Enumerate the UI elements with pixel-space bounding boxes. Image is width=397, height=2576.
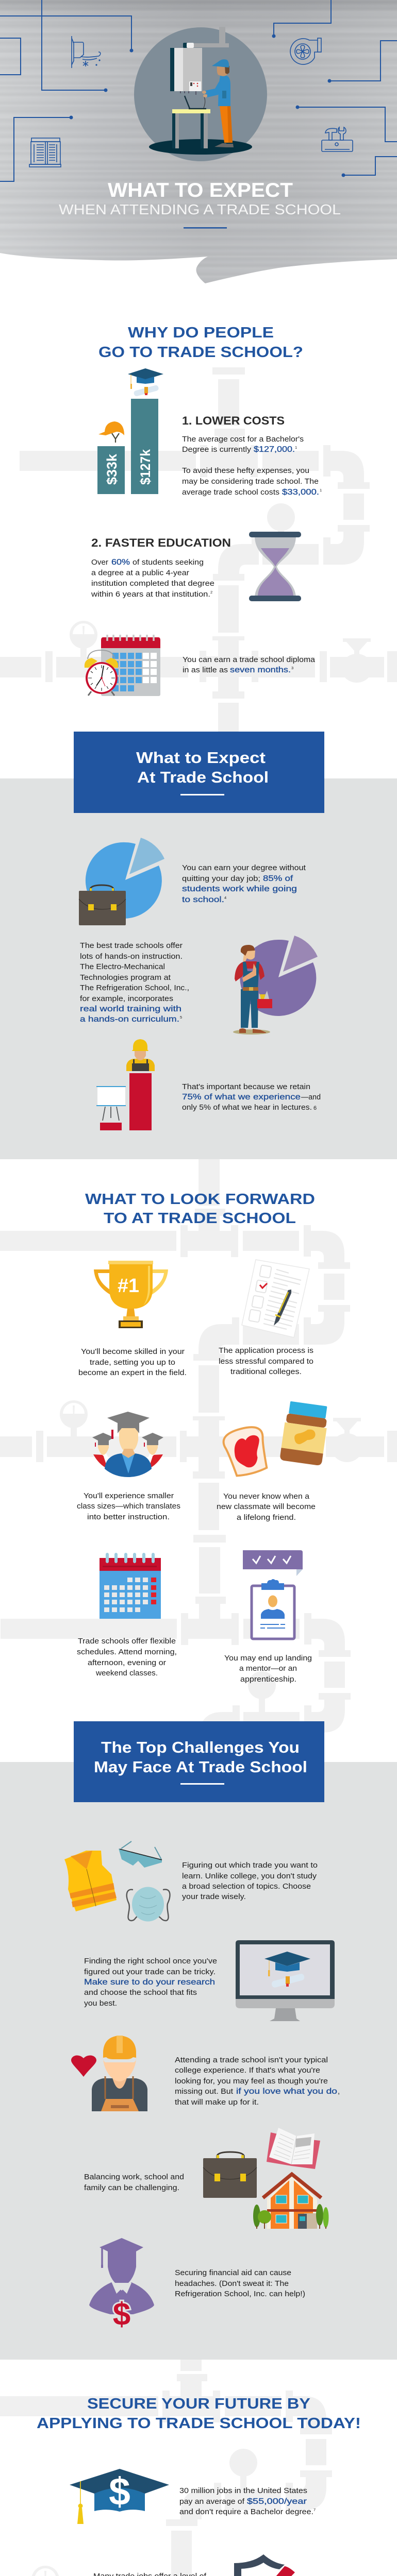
section: faster education: 2. FASTER EDUCATION	[91, 536, 231, 549]
text: college experience: ,	[338, 2088, 340, 2096]
toast	[221, 1424, 272, 1479]
text: 30 million jobs: 30 million jobs in the United States	[179, 2487, 307, 2495]
heading: what to look forward to	[85, 1191, 315, 1227]
icon: toast and peanut butter	[221, 1401, 330, 1479]
text: seven months: 3	[291, 666, 293, 670]
text: balancing work	[84, 2173, 184, 2192]
alarm clock	[88, 650, 114, 659]
text: lifelong friend: a lifelong friend.	[237, 1514, 296, 1522]
heading: why do people go: GO TO TRADE SCHOOL?	[98, 344, 303, 361]
text: flexible schedules: schedules. Attend morning,	[77, 1648, 177, 1656]
clipboard	[252, 1586, 294, 1639]
icon: worker with heart	[71, 2036, 147, 2111]
heading: secure your future	[37, 2396, 361, 2432]
panel: top challenges heading box: May Face At Trade School	[94, 1758, 307, 1776]
section: lower costs: average trade school costs	[182, 488, 279, 497]
panel: what to expect heading box: At Trade School	[137, 768, 269, 786]
section: faster education: 2	[210, 590, 212, 595]
icon: condenser unit	[29, 138, 61, 167]
chart: cost bars	[97, 368, 163, 494]
icon: shield with check	[234, 2554, 295, 2576]
section: lower costs: 1	[295, 445, 297, 450]
chart: cost bars: $127k	[138, 449, 153, 485]
icon: mentor clipboard and speech bubble	[243, 1550, 303, 1639]
pie: 85 percent	[86, 842, 162, 919]
text: lifelong friend: You never know when a	[223, 1493, 310, 1501]
icon: briefcase	[79, 885, 126, 925]
section: faster education: of students seeking	[133, 558, 204, 567]
icon: presentation board	[96, 1086, 126, 1121]
text: work while going to school: 4	[224, 895, 226, 900]
icon: graduates	[92, 1412, 163, 1477]
text: seven months	[183, 656, 316, 674]
heading: secure your future: SECURE YOUR FUTURE BY	[87, 2396, 310, 2412]
text: flexible schedules: Trade schools offer flexible	[78, 1637, 176, 1646]
heading: why do people go	[98, 325, 303, 361]
dust mask	[127, 1887, 170, 1922]
panel: what to expect grey band	[0, 778, 397, 1159]
text: hands-on instruction: for example, incorporates	[80, 995, 173, 1003]
heading: why do people go: WHY DO PEOPLE	[128, 325, 274, 341]
text: retention	[182, 1083, 321, 1112]
backdrop oval	[134, 27, 267, 161]
panel: what to expect heading box: What to Expect	[136, 749, 266, 767]
jar	[279, 1401, 330, 1466]
header: brushed metal banner	[0, 0, 397, 289]
text: skilled in trade: become an expert in the field.	[78, 1369, 187, 1377]
text: college experience: college experience. If that's what you're	[175, 2066, 320, 2075]
technician figure	[220, 106, 233, 143]
text: application process: less stressful compared to	[219, 1358, 313, 1366]
speech bubble	[243, 1550, 303, 1569]
text: smaller class sizes	[77, 1492, 180, 1521]
briefcase	[203, 2152, 257, 2198]
section: faster education: 60%	[111, 558, 130, 567]
text: right school: figured out your trade can be tricky.	[84, 1968, 216, 1976]
text: seven months: seven months.	[230, 666, 291, 674]
text: mentor or apprenticeship: You may end up landing	[224, 1654, 312, 1663]
text: balancing work: family can be challenging.	[84, 2184, 179, 2192]
text: smaller class sizes: into better instruction.	[87, 1513, 170, 1521]
text: 30 million jobs: pay an average of	[179, 2498, 245, 2506]
section: lower costs: 1	[320, 488, 322, 493]
text: flexible schedules: weekend classes.	[95, 1669, 158, 1677]
icon: tools and AC unit	[322, 127, 353, 151]
icon: briefcase, book and house	[203, 2128, 329, 2229]
icon: graduate with dollar sign: $	[113, 2297, 130, 2332]
text: retention: —and	[301, 1093, 321, 1101]
text: lifelong friend	[217, 1493, 316, 1522]
safety vest	[64, 1851, 117, 1911]
header circuit lines	[0, 0, 397, 181]
bar: lecture 5 percent	[100, 1123, 122, 1130]
text: retention: That's important because we retain	[182, 1083, 310, 1091]
text: work while going to school: to school.	[182, 895, 224, 904]
text: work while going to school: 85% of	[263, 874, 293, 883]
icon: hard hat	[98, 421, 124, 443]
text: college experience: if you love what you do	[236, 2087, 337, 2096]
laptop	[185, 96, 206, 109]
text: retention: 75% of what we experience	[182, 1093, 301, 1101]
icon: safety gear	[64, 1841, 170, 1922]
text: college experience	[175, 2056, 340, 2107]
text: hands-on instruction: real world training with	[80, 1005, 181, 1013]
chart: cost bars: $33k	[104, 453, 120, 485]
text: flexible schedules: afternoon, evening or	[88, 1659, 166, 1667]
text: hands-on instruction: The Refrigeration School, Inc.,	[80, 984, 189, 992]
figure: technician thumbs up	[233, 945, 272, 1035]
icon: cap with dollar sign	[70, 2469, 169, 2524]
bar: experience 75 percent	[129, 1073, 152, 1130]
text: application process	[219, 1347, 313, 1376]
icon: cap with dollar sign: $	[109, 2470, 130, 2513]
heading: secure your future: APPLYING TO TRADE SCHOOL TODAY!	[37, 2415, 361, 2432]
section: faster education: a degree at a public 4-year	[91, 569, 189, 577]
text: balancing work: Balancing work, school and	[84, 2173, 184, 2181]
furnace unit	[170, 48, 174, 91]
text: which trade: a broad selection of topics. Choose	[182, 1883, 311, 1891]
text: financial aid	[175, 2269, 305, 2298]
text: mentor or apprenticeship	[224, 1654, 312, 1684]
section: faster education: Over	[91, 558, 108, 567]
text: right school: Make sure to do your research	[84, 1978, 215, 1987]
section: faster education: institution completed that degree	[91, 580, 214, 588]
text: right school: and choose the school that fits	[84, 1989, 197, 1997]
section: lower costs: 1. LOWER COSTS	[182, 414, 285, 427]
text: which trade: learn. Unlike college, you don't study	[182, 1872, 317, 1880]
icon: hourglass	[249, 532, 301, 601]
illustration: technician at furnace	[134, 27, 267, 161]
text: application process: The application process is	[219, 1347, 313, 1355]
title: WHAT TO EXPECT	[108, 179, 293, 201]
text: which trade: Figuring out which trade you want to	[182, 1861, 318, 1870]
text: seven months: in as little as	[183, 666, 228, 674]
floor shadow	[149, 139, 252, 155]
text: smaller class sizes: You'll experience smaller	[84, 1492, 174, 1500]
pie: slice	[283, 936, 318, 972]
section: lower costs: The average cost for a Bachelor's	[182, 435, 304, 444]
house	[253, 2174, 329, 2229]
bar: bachelor's $127k	[131, 399, 158, 494]
text: hands-on instruction: Technologies program at	[80, 974, 171, 982]
text: 30 million jobs	[179, 2487, 316, 2516]
open book	[267, 2128, 320, 2169]
text: skilled in trade	[78, 1348, 187, 1377]
text: 30 million jobs: 7	[313, 2507, 316, 2512]
icon: trophy	[94, 1261, 168, 1328]
text: hands-on instruction	[80, 942, 189, 1024]
text: work while going to school: quitting your day job;	[182, 875, 260, 883]
text: lifelong friend: new classmate will become	[217, 1503, 316, 1511]
text: smaller class sizes: class sizes—which translates	[77, 1502, 180, 1511]
text: work while going to school	[182, 864, 306, 904]
chart: blue pie with briefcase	[79, 838, 164, 925]
figure: worker	[126, 1039, 155, 1071]
text: work while going to school: students work while going	[182, 885, 297, 893]
text: right school: Finding the right school once you've	[84, 1957, 217, 1965]
text: college experience: looking for, you may feel as though you're	[175, 2077, 328, 2086]
title rule	[184, 227, 227, 229]
text: mentor or apprenticeship: apprenticeship.	[240, 1675, 296, 1684]
subtitle: WHEN ATTENDING A TRADE SCHOOL	[59, 201, 341, 217]
panel: what to expect heading box	[74, 732, 324, 813]
icon: graduate with dollar sign	[89, 2238, 154, 2332]
text: skilled in trade: You'll become skilled in your	[81, 1348, 185, 1356]
text: hands-on instruction: a hands-on curriculum.	[80, 1015, 179, 1024]
table	[172, 109, 210, 113]
heading: what to look forward to: WHAT TO LOOK FORWARD	[85, 1191, 315, 1208]
panel: top challenges heading box: The Top Challenges You	[101, 1738, 300, 1756]
panel: top challenges heading box	[74, 1721, 324, 1802]
text: mentor or apprenticeship: a mentor—or an	[239, 1665, 297, 1673]
icon: wall air conditioner	[72, 36, 101, 68]
text: right school: you best.	[84, 1999, 117, 2008]
icon: application checklist	[242, 1260, 309, 1337]
section: faster education: within 6 years at that institution.	[91, 590, 210, 599]
section: lower costs: Degree is currently	[182, 446, 252, 454]
text: college experience: that will make up for it.	[175, 2098, 259, 2107]
chart: purple pie with technician	[233, 936, 318, 1035]
panel: top challenges grey band	[0, 1762, 397, 2360]
text: seven months: You can earn a trade school diploma	[183, 656, 316, 664]
goggles	[119, 1841, 162, 1868]
icon: diploma	[134, 385, 159, 397]
icon: computer monitor with cap	[236, 1940, 335, 2021]
icon: graduation cap	[128, 368, 163, 389]
control panel	[189, 81, 201, 91]
text: which trade: your trade wisely.	[182, 1893, 246, 1901]
pie: slice	[129, 838, 164, 874]
heading: what to look forward to: TO AT TRADE SCHOOL	[104, 1210, 296, 1227]
text: college experience: Attending a trade school isn't your typical	[175, 2056, 328, 2064]
section: lower costs: $127,000.	[254, 445, 295, 454]
pie: main	[240, 940, 316, 1016]
text: work while going to school: You can earn your degree without	[182, 864, 306, 872]
icon: trophy: #1	[118, 1275, 139, 1297]
section: lower costs: may be considering trade school. The	[182, 478, 319, 486]
section: lower costs: To avoid these hefty expenses, you	[182, 467, 309, 475]
text: hands-on instruction: lots of hands-on instruction.	[80, 953, 183, 961]
text: skilled in trade: trade, setting you up to	[90, 1359, 175, 1367]
text: financial aid: Refrigeration School, Inc. can help!)	[175, 2290, 305, 2298]
chart: retention bars with worker	[96, 1039, 155, 1130]
section: lower costs: $33,000.	[282, 488, 319, 497]
text: financial aid: headaches. (Don't sweat it: The	[175, 2280, 289, 2288]
text: financial aid: Securing financial aid can cause	[175, 2269, 291, 2277]
text: hands-on instruction: 5	[180, 1015, 182, 1020]
icon: calendar and alarm clock	[85, 635, 160, 696]
text: which trade	[182, 1861, 318, 1901]
section: lower costs	[182, 414, 322, 497]
icon: flexible schedule calendar	[100, 1554, 161, 1619]
text: right school	[84, 1957, 217, 2008]
text: 30 million jobs: $55,000/year	[247, 2497, 307, 2506]
text: hands-on instruction: The Electro-Mechanical	[80, 963, 165, 971]
text: flexible schedules	[77, 1637, 177, 1677]
exhaust pipe	[194, 27, 229, 47]
title	[59, 179, 341, 229]
text: 30 million jobs: and don't require a Bachelor degree.	[179, 2508, 313, 2516]
text: application process: traditional colleges.	[230, 1368, 302, 1376]
icon: turbine	[290, 38, 321, 64]
text: college experience: missing out. But	[175, 2088, 233, 2096]
heart	[71, 2055, 96, 2077]
section: faster education	[91, 536, 231, 599]
text: hands-on instruction: The best trade schools offer	[80, 942, 183, 950]
bar: trade school $33k	[97, 446, 125, 494]
text: retention: 6	[313, 1105, 317, 1111]
text: retention: only 5% of what we hear in lectures.	[182, 1104, 312, 1112]
